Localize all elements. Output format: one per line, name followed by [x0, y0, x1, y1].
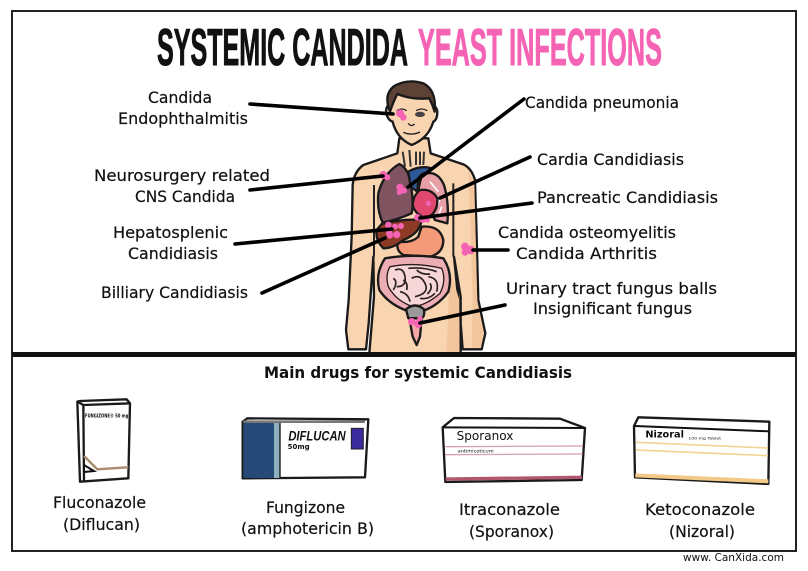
- drug names: (amphotericin B): [241, 519, 374, 538]
- title: SYSTEMIC CANDIDA: [157, 19, 408, 77]
- drug box: Nizoral: 100 mg Tablet: [688, 436, 722, 440]
- neck lines: [403, 150, 424, 167]
- drug box: Nizoral: Nizoral: [645, 429, 684, 440]
- left labels: Hepatosplenic: [113, 223, 228, 242]
- right labels: Cardia Candidiasis: [537, 150, 684, 169]
- urethra: [409, 318, 422, 345]
- right labels: Pancreatic Candidiasis: [537, 188, 718, 207]
- right labels: Insignificant fungus: [533, 299, 692, 318]
- left labels: Candida: [148, 88, 212, 107]
- right labels: Candida Arthritis: [516, 244, 657, 263]
- right callout lines: [408, 99, 532, 323]
- bladder: [406, 305, 424, 318]
- human body anatomy figure: [346, 81, 485, 353]
- left labels: [94, 88, 270, 302]
- left callout lines: [235, 104, 393, 293]
- stomach: [397, 226, 443, 257]
- website credit: www. CanXida.com: [683, 551, 784, 564]
- drug names: Fungizone: [266, 498, 345, 517]
- left labels: Neurosurgery related: [94, 166, 270, 185]
- drug names: Fluconazole: [53, 493, 146, 512]
- liver: [376, 220, 422, 248]
- drug box: Fungizone: [77, 399, 130, 482]
- drug names: (Sporanox): [469, 522, 554, 541]
- shaded side: [447, 170, 483, 352]
- drug names: [53, 493, 755, 541]
- arm lines: [374, 183, 453, 257]
- drug names: Ketoconazole: [645, 500, 755, 519]
- right labels: Urinary tract fungus balls: [506, 279, 717, 298]
- intestines: [378, 256, 450, 313]
- drug box: Sporanox: [443, 418, 585, 482]
- right lung: [378, 164, 413, 223]
- left labels: CNS Candida: [135, 187, 235, 206]
- body silhouette: [346, 138, 485, 353]
- drug box: Diflucan: DIFLUCAN: [288, 428, 346, 444]
- drug names: (Diflucan): [63, 515, 140, 534]
- infection spots: [379, 109, 475, 328]
- right labels: Candida osteomyelitis: [498, 223, 676, 242]
- right labels: Candida pneumonia: [525, 93, 679, 112]
- drug names: (Nizoral): [669, 522, 735, 541]
- divider: [12, 352, 796, 357]
- left labels: Candidiasis: [128, 244, 218, 263]
- drug names: Itraconazole: [459, 500, 560, 519]
- drug box: Diflucan: 50mg: [288, 442, 310, 451]
- drug box: Diflucan: [243, 418, 368, 478]
- left labels: Billiary Candidiasis: [101, 283, 248, 302]
- head: [386, 90, 437, 145]
- drug box: Nizoral: [634, 417, 769, 484]
- left labels: Endophthalmitis: [118, 109, 248, 128]
- face features: [397, 109, 427, 134]
- vessels: [408, 167, 432, 192]
- left lung on viewer right: [418, 173, 448, 223]
- heart: [413, 190, 437, 218]
- drug box: Fungizone: FUNGIZONE® 50 mg: [85, 413, 128, 419]
- hair: [387, 81, 435, 112]
- drugs heading: Main drugs for systemic Candidiasis: [264, 363, 572, 382]
- drug box: Sporanox: antimicoticum: [458, 448, 494, 453]
- drug box: Sporanox: Sporanox: [457, 429, 513, 443]
- right labels: [498, 93, 718, 318]
